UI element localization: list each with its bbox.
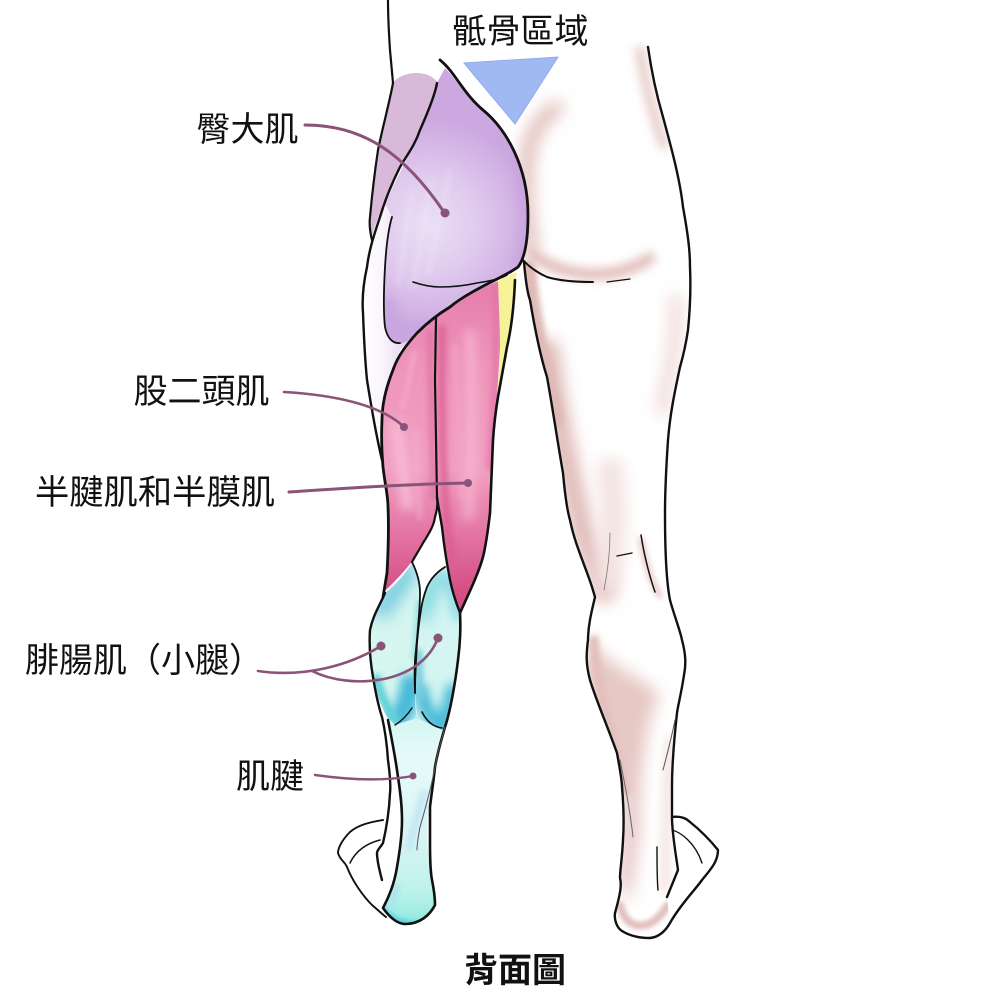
- label: semitendinosus and semimembranosus: 半腱肌和半膜肌: [35, 474, 275, 512]
- icon: sacrum triangle: [464, 57, 558, 124]
- calf shading mass: [585, 640, 660, 905]
- gastrocnemius right head: [415, 568, 459, 730]
- gluteus maximus muscle: [384, 68, 527, 344]
- leader: gluteus maximus: [305, 125, 450, 218]
- side thigh pale lilac: [362, 205, 417, 458]
- adductor yellow: [495, 272, 517, 417]
- label: sacral region: 骶骨區域: [452, 13, 588, 51]
- side hip pale lavender: [370, 73, 437, 240]
- label: gluteus maximus: 臀大肌: [196, 111, 298, 149]
- label: tendon: 肌腱: [236, 758, 304, 796]
- label: gastrocnemius calf: 腓腸肌（小腿）: [25, 642, 263, 680]
- body outlines: [338, 0, 718, 938]
- achilles tendon: [384, 718, 443, 923]
- label: biceps femoris: 股二頭肌: [134, 373, 270, 411]
- leader: semitendinosus and semimembranosus: [289, 479, 472, 492]
- leader: biceps femoris: [284, 392, 408, 431]
- leader: gastrocnemius: [258, 634, 442, 681]
- right leg skin shading: [526, 50, 676, 926]
- gastrocnemius left head: [370, 563, 420, 724]
- biceps femoris: [383, 319, 436, 590]
- leader: tendon: [315, 772, 416, 780]
- semitendinosus and semimembranosus: [436, 281, 500, 610]
